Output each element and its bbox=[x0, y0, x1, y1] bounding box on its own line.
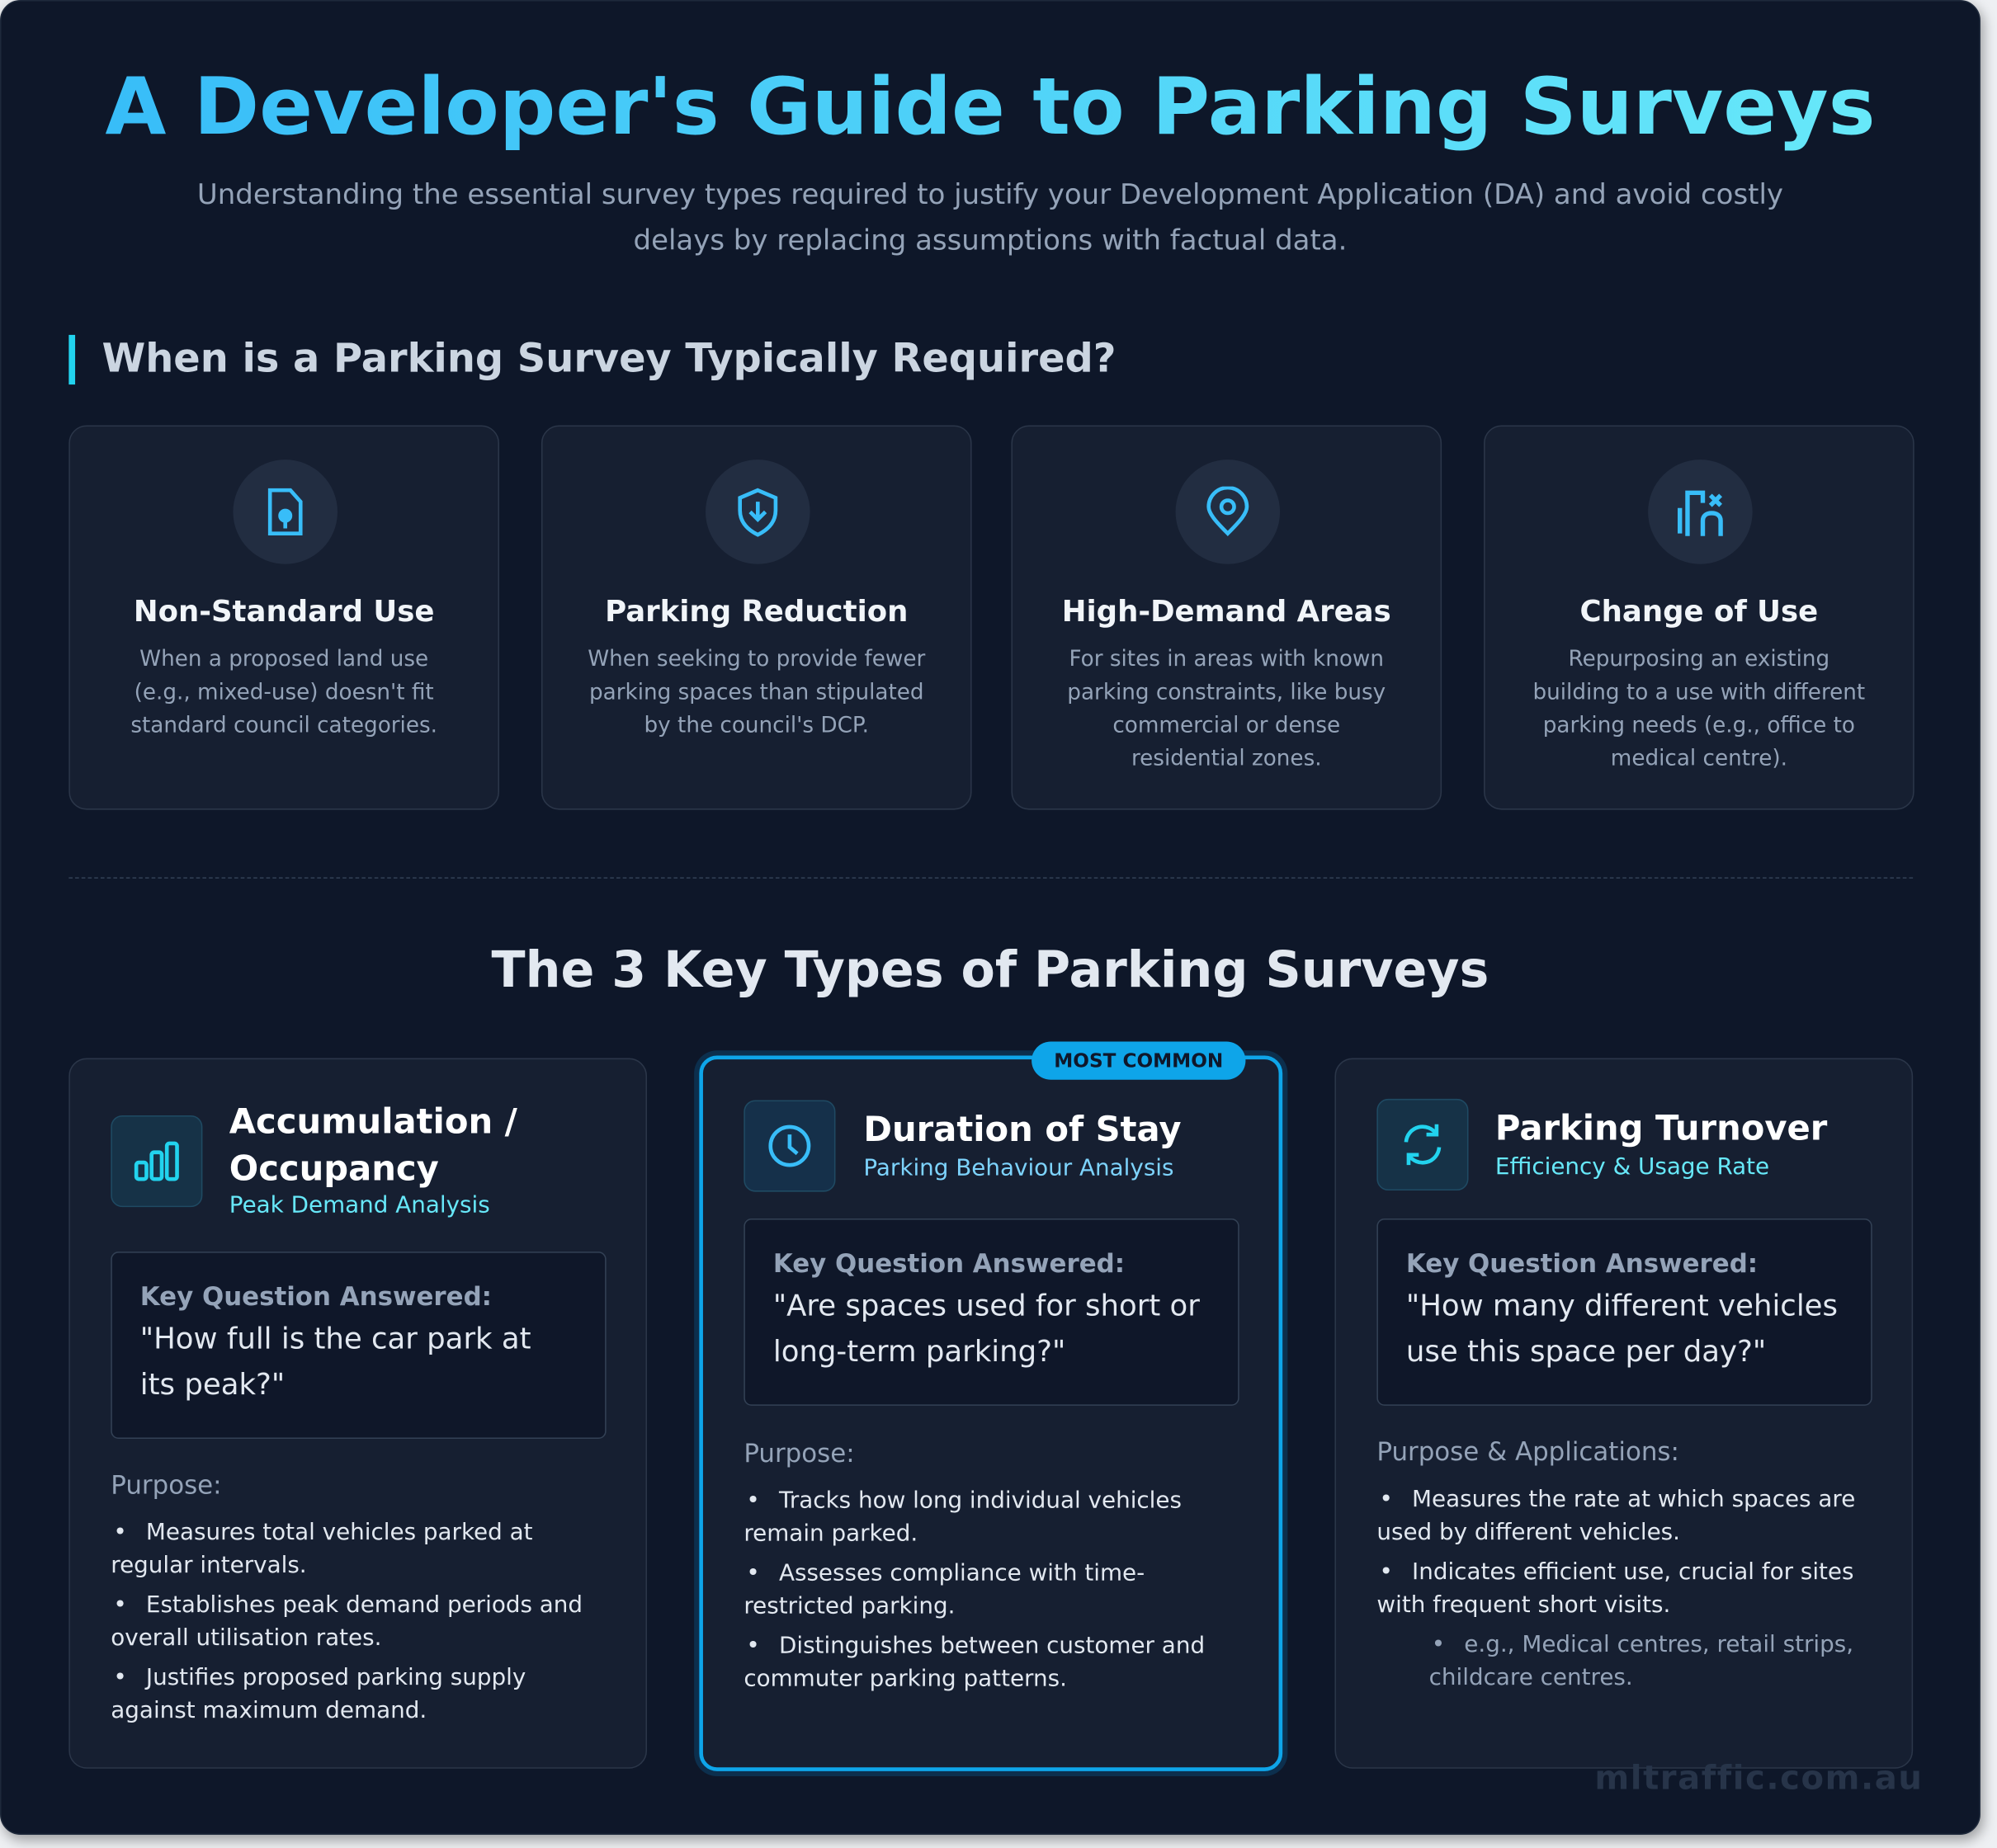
watermark: mltraffic.com.au bbox=[1594, 1760, 1923, 1798]
bullet list: Measures the rate at which spaces are used by different vehicles. bbox=[1376, 1486, 1855, 1546]
subtitle: Understanding the essential survey types required to justify your Development Application (DA) and avoid costly delays by replacing assumptions with factual data. bbox=[197, 180, 1783, 257]
card: parking reduction: Parking Reduction bbox=[605, 596, 908, 629]
key question box: Key Question Answered: bbox=[140, 1281, 492, 1312]
panel: parking turnover bbox=[1334, 1058, 1913, 1769]
bullet list bbox=[744, 1487, 1205, 1692]
key question box: Key Question Answered: bbox=[773, 1248, 1125, 1279]
panel: parking turnover: Purpose & Applications: bbox=[1376, 1436, 1679, 1467]
panel: accumulation / occupancy: Accumulation / bbox=[229, 1103, 517, 1142]
card: change of use: Change of Use bbox=[1580, 596, 1818, 629]
panel: accumulation / occupancy bbox=[68, 1058, 647, 1769]
icon: shield bbox=[706, 460, 810, 564]
card: high-demand areas: High-Demand Areas bbox=[1062, 596, 1391, 629]
panel: parking turnover: Parking Turnover bbox=[1495, 1109, 1827, 1148]
badge: most common bbox=[1032, 1041, 1245, 1080]
badge: most common: MOST COMMON bbox=[1054, 1049, 1223, 1072]
section heading: 3 key types: The 3 Key Types of Parking Surveys bbox=[492, 942, 1489, 1000]
bullet list bbox=[111, 1519, 583, 1724]
card: high-demand areas: For sites in areas with known parking constraints, like busy commercial or dense residential zones. bbox=[1067, 647, 1386, 771]
icon: clock bbox=[744, 1100, 835, 1192]
bullet list: Establishes peak demand periods and overall utilisation rates. bbox=[111, 1591, 583, 1652]
panel: duration of stay (highlighted): Duration of Stay bbox=[863, 1110, 1182, 1150]
panel: duration of stay (highlighted) bbox=[699, 1055, 1282, 1771]
card: high-demand areas bbox=[1011, 425, 1442, 810]
bullet list bbox=[1376, 1486, 1855, 1691]
key question box: Key Question Answered: bbox=[1406, 1248, 1758, 1279]
card: non-standard use: When a proposed land use (e.g., mixed-use) doesn't fit standard council categories. bbox=[130, 647, 437, 738]
card: change of use: Repurposing an existing building to a use with different parking needs (e.g., office to medical centre). bbox=[1532, 647, 1865, 771]
icon: bar chart bbox=[111, 1115, 202, 1207]
title: A Developer's Guide to Parking Surveys bbox=[105, 60, 1876, 153]
card: parking reduction bbox=[541, 425, 972, 810]
bullet list: Indicates efficient use, crucial for sites with frequent short visits. bbox=[1376, 1558, 1854, 1619]
key question box: "How full is the car park at its peak?" bbox=[140, 1323, 531, 1402]
card: change of use bbox=[1484, 425, 1914, 810]
bullet list: Assesses compliance with time-restricted parking. bbox=[744, 1560, 1145, 1619]
panel: accumulation / occupancy: Occupancy bbox=[229, 1150, 439, 1190]
bullet list: Justifies proposed parking supply against maximum demand. bbox=[111, 1664, 526, 1724]
key question box: "Are spaces used for short or long-term parking?" bbox=[773, 1289, 1200, 1369]
panel: duration of stay (highlighted): Parking Behaviour Analysis bbox=[863, 1155, 1174, 1181]
card: non-standard use bbox=[68, 425, 499, 810]
icon: refresh bbox=[1376, 1099, 1469, 1190]
icon: building change bbox=[1648, 460, 1753, 564]
section heading: when required: When is a Parking Survey Typically Required? bbox=[102, 336, 1117, 382]
key question box: "How many different vehicles use this space per day?" bbox=[1406, 1289, 1838, 1369]
bullet list: Tracks how long individual vehicles remain parked. bbox=[744, 1487, 1182, 1547]
key question box bbox=[1376, 1219, 1872, 1406]
panel: accumulation / occupancy: Purpose: bbox=[111, 1469, 222, 1500]
panel: parking turnover: Efficiency & Usage Rate bbox=[1495, 1153, 1769, 1181]
key question box bbox=[111, 1252, 607, 1439]
bullet list: Distinguishes between customer and commuter parking patterns. bbox=[744, 1633, 1205, 1692]
card: parking reduction: When seeking to provide fewer parking spaces than stipulated by the council's DCP. bbox=[588, 647, 925, 738]
icon: location pin bbox=[1176, 460, 1280, 564]
bullet list: Measures total vehicles parked at regular intervals. bbox=[111, 1519, 533, 1579]
panel: duration of stay (highlighted): Purpose: bbox=[744, 1437, 855, 1468]
icon: document bbox=[233, 460, 338, 564]
key question box bbox=[744, 1219, 1239, 1406]
panel: accumulation / occupancy: Peak Demand Analysis bbox=[229, 1192, 490, 1219]
card: non-standard use: Non-Standard Use bbox=[134, 596, 434, 629]
bullet list: e.g., Medical centres, retail strips, childcare centres. bbox=[1429, 1631, 1853, 1691]
